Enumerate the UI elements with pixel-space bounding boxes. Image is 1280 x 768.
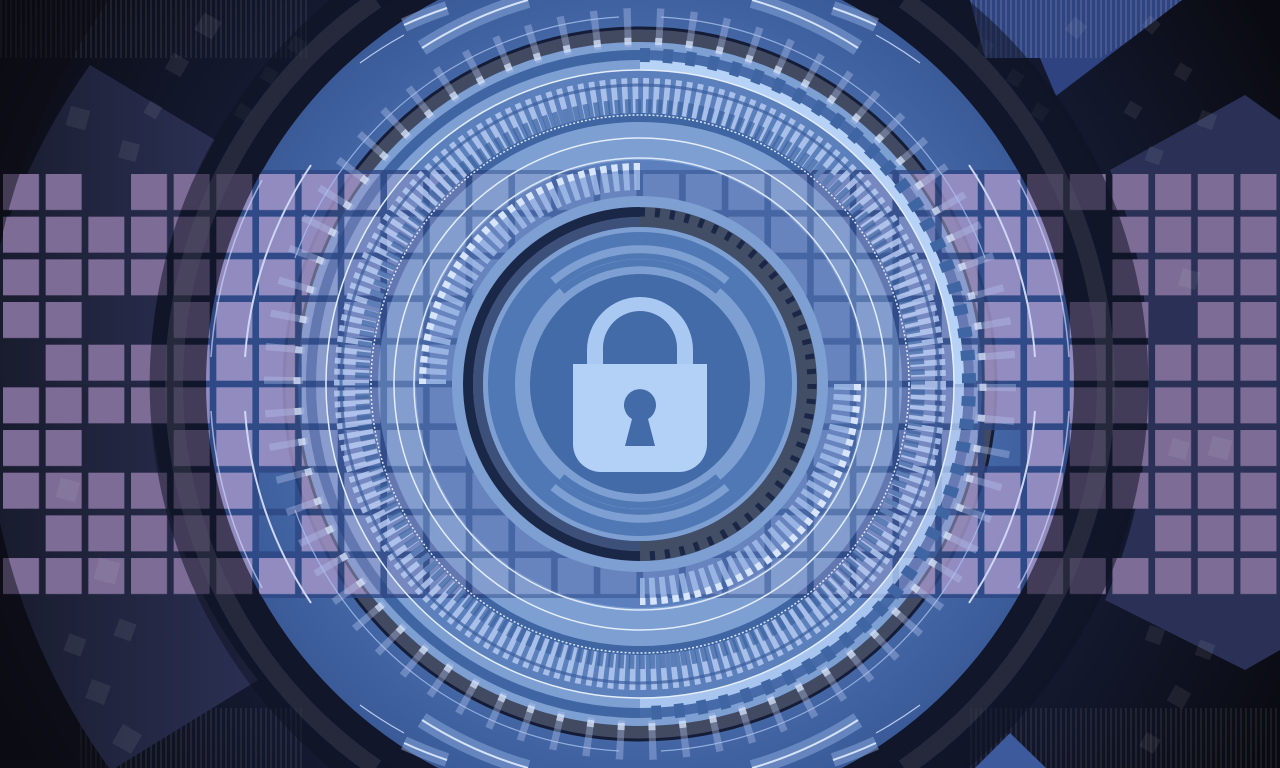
left vignette (0, 0, 109, 768)
panel: blue disc (206, 0, 1074, 768)
icon: padlock (573, 297, 707, 472)
main tick ring (341, 85, 939, 683)
inner tick arcs (422, 166, 858, 602)
ring bands (284, 28, 996, 740)
dark lock ring (468, 212, 812, 556)
panel: bottom right blue shape (975, 733, 1046, 768)
central blue field (483, 227, 797, 541)
outer dark ring (150, 0, 1148, 768)
lavender squares over the disc (206, 174, 1074, 594)
padlock keyhole (624, 389, 656, 446)
long outer arcs in each quadrant (211, 0, 1069, 768)
padlock shackle (587, 297, 693, 366)
inner light ring (458, 202, 822, 566)
grid of lavender squares (0, 170, 1280, 598)
panel: top right blue shape (970, 0, 1182, 96)
padlock body (573, 364, 707, 472)
grid gaps over the disc (206, 170, 1074, 598)
outer tick ring (284, 28, 996, 740)
bright segmented arc on the right (326, 55, 969, 713)
thin inner circles (394, 138, 886, 630)
